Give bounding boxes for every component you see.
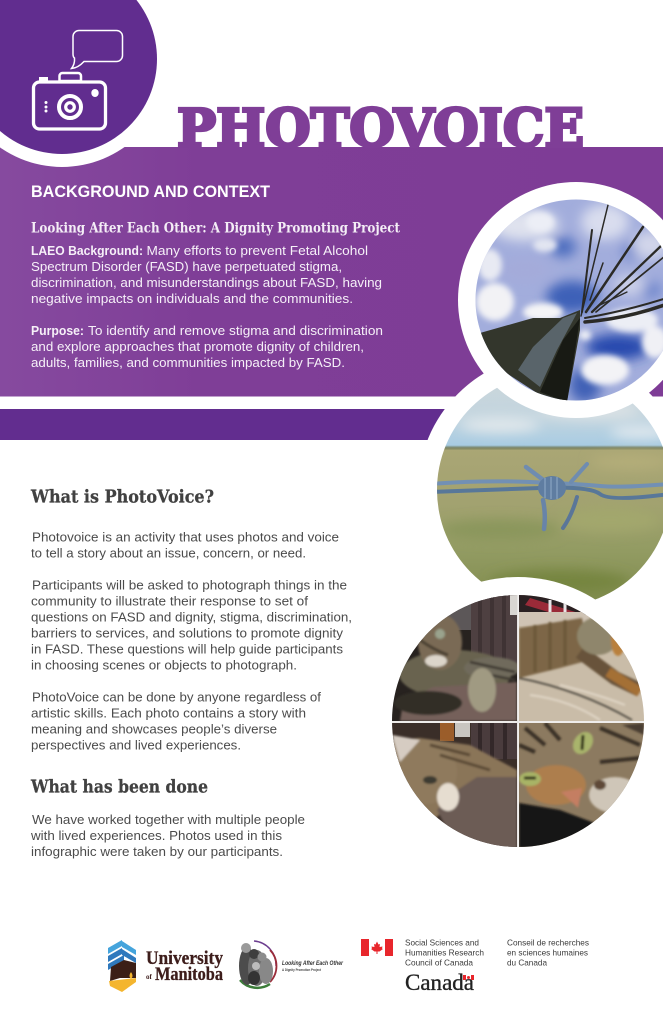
photo ring: tipi [458,182,663,418]
text: SSHRC English name: Council of Canada [405,958,473,968]
panel: purple background band [0,147,663,396]
text block: LAEO background: LAEO Background: [31,243,143,258]
icon: camera [34,73,106,129]
icon: shield [108,940,136,992]
photo ring: barbed wire [418,354,663,626]
cat photo: bottom left [392,723,517,848]
text block: participants: barriers to services, and solutions to promote dignity [31,625,343,640]
badge: camera circle [0,0,157,154]
icon: people in a circle [239,941,276,988]
text block: definition: Photovoice is an activity that uses photos and voice [32,529,339,544]
text: SSHRC French name [507,938,589,968]
divider lines [390,590,650,850]
text block: LAEO background: discrimination, and misunderstandings about FASD, having [31,275,382,290]
text block: purpose [31,323,383,370]
logo: Looking After Each Other: A Dignity Promotion Project [282,968,322,972]
text block: LAEO background: negative impacts on individuals and the communities. [31,291,353,306]
text: SSHRC French name: en sciences humaines [507,948,588,958]
badge: white ring around camera circle [0,0,170,167]
dark purple strip [0,409,663,440]
cat photo: top left [392,595,520,721]
photo: four cat portraits [390,590,650,850]
text block: participants: questions on FASD and dignity, stigma, discrimination, [31,609,352,624]
text block: purpose: and explore approaches that promote dignity of children, [31,339,364,354]
text: SSHRC English name [405,938,484,968]
text block: purpose: adults, families, and communities impacted by FASD. [31,355,345,370]
heading: background and context: BACKGROUND AND CONTEXT [31,183,270,201]
text block: purpose: Purpose: [31,323,84,338]
logo: University of Manitoba: University [146,949,224,969]
logo: Canada wordmark: Canada [405,970,474,995]
text block: what has been done: infographic were taken by our participants. [31,844,283,859]
text: SSHRC French name: du Canada [507,958,547,968]
cat photo: bottom right [519,723,644,848]
heading: what is PhotoVoice: What is PhotoVoice? [30,487,214,508]
text: SSHRC English name: Social Sciences and [405,938,479,948]
title: PHOTOVOICE: PHOTOVOICE [177,98,584,160]
text block: LAEO background: Many efforts to prevent Fetal Alcohol [146,243,368,258]
icon: speech bubble [72,30,123,68]
logo: Looking After Each Other [239,941,343,988]
text: SSHRC French name: Conseil de recherches [507,938,589,948]
cat photo: top right [519,595,644,721]
text block: purpose: To identify and remove stigma and discrimination [88,323,383,338]
text block: participants: Participants will be asked to photograph things in the [32,577,347,592]
logo: University of Manitoba [108,940,224,992]
text block: anyone can do it: meaning and showcases people’s diverse [31,722,277,737]
text block: anyone can do it: perspectives and lived experiences. [31,738,241,753]
text block: anyone can do it: PhotoVoice can be done by anyone regardless of [32,690,321,705]
text block: participants: in FASD. These questions will help guide participants [31,641,343,656]
text block: participants: community to illustrate their response to set of [31,593,308,608]
text block: definition [31,529,339,560]
subheading: project name: Looking After Each Other: A Dignity Promoting Project [31,220,401,236]
text block: what has been done: We have worked together with multiple people [32,812,305,827]
logo: Canadian flag [361,939,393,956]
text block: anyone can do it: artistic skills. Each photo contains a story with [31,706,306,721]
text block: what has been done: with lived experiences. Photos used in this [30,828,282,843]
photo: barbed wire over field [437,388,663,600]
text block: what has been done [30,812,305,859]
text block: definition: to tell a story about an issue, concern, or need. [31,545,306,560]
photo: tipi poles against cloudy sky [470,195,663,405]
photo ring: cats [374,577,662,865]
text block: participants [31,577,352,672]
text block: LAEO background: Spectrum Disorder (FASD) have perpetuated stigma, [31,259,342,274]
heading: what has been done: What has been done [30,776,208,797]
logo: University of Manitoba: of [146,973,152,981]
logo: University of Manitoba: Manitoba [155,965,223,985]
text block: participants: in choosing scenes or objects to photograph. [31,657,297,672]
text: SSHRC English name: Humanities Research [405,948,484,958]
text block: anyone can do it [31,690,321,753]
logo: Looking After Each Other: Looking After Each Other [282,960,343,967]
text block: LAEO background [31,243,382,306]
